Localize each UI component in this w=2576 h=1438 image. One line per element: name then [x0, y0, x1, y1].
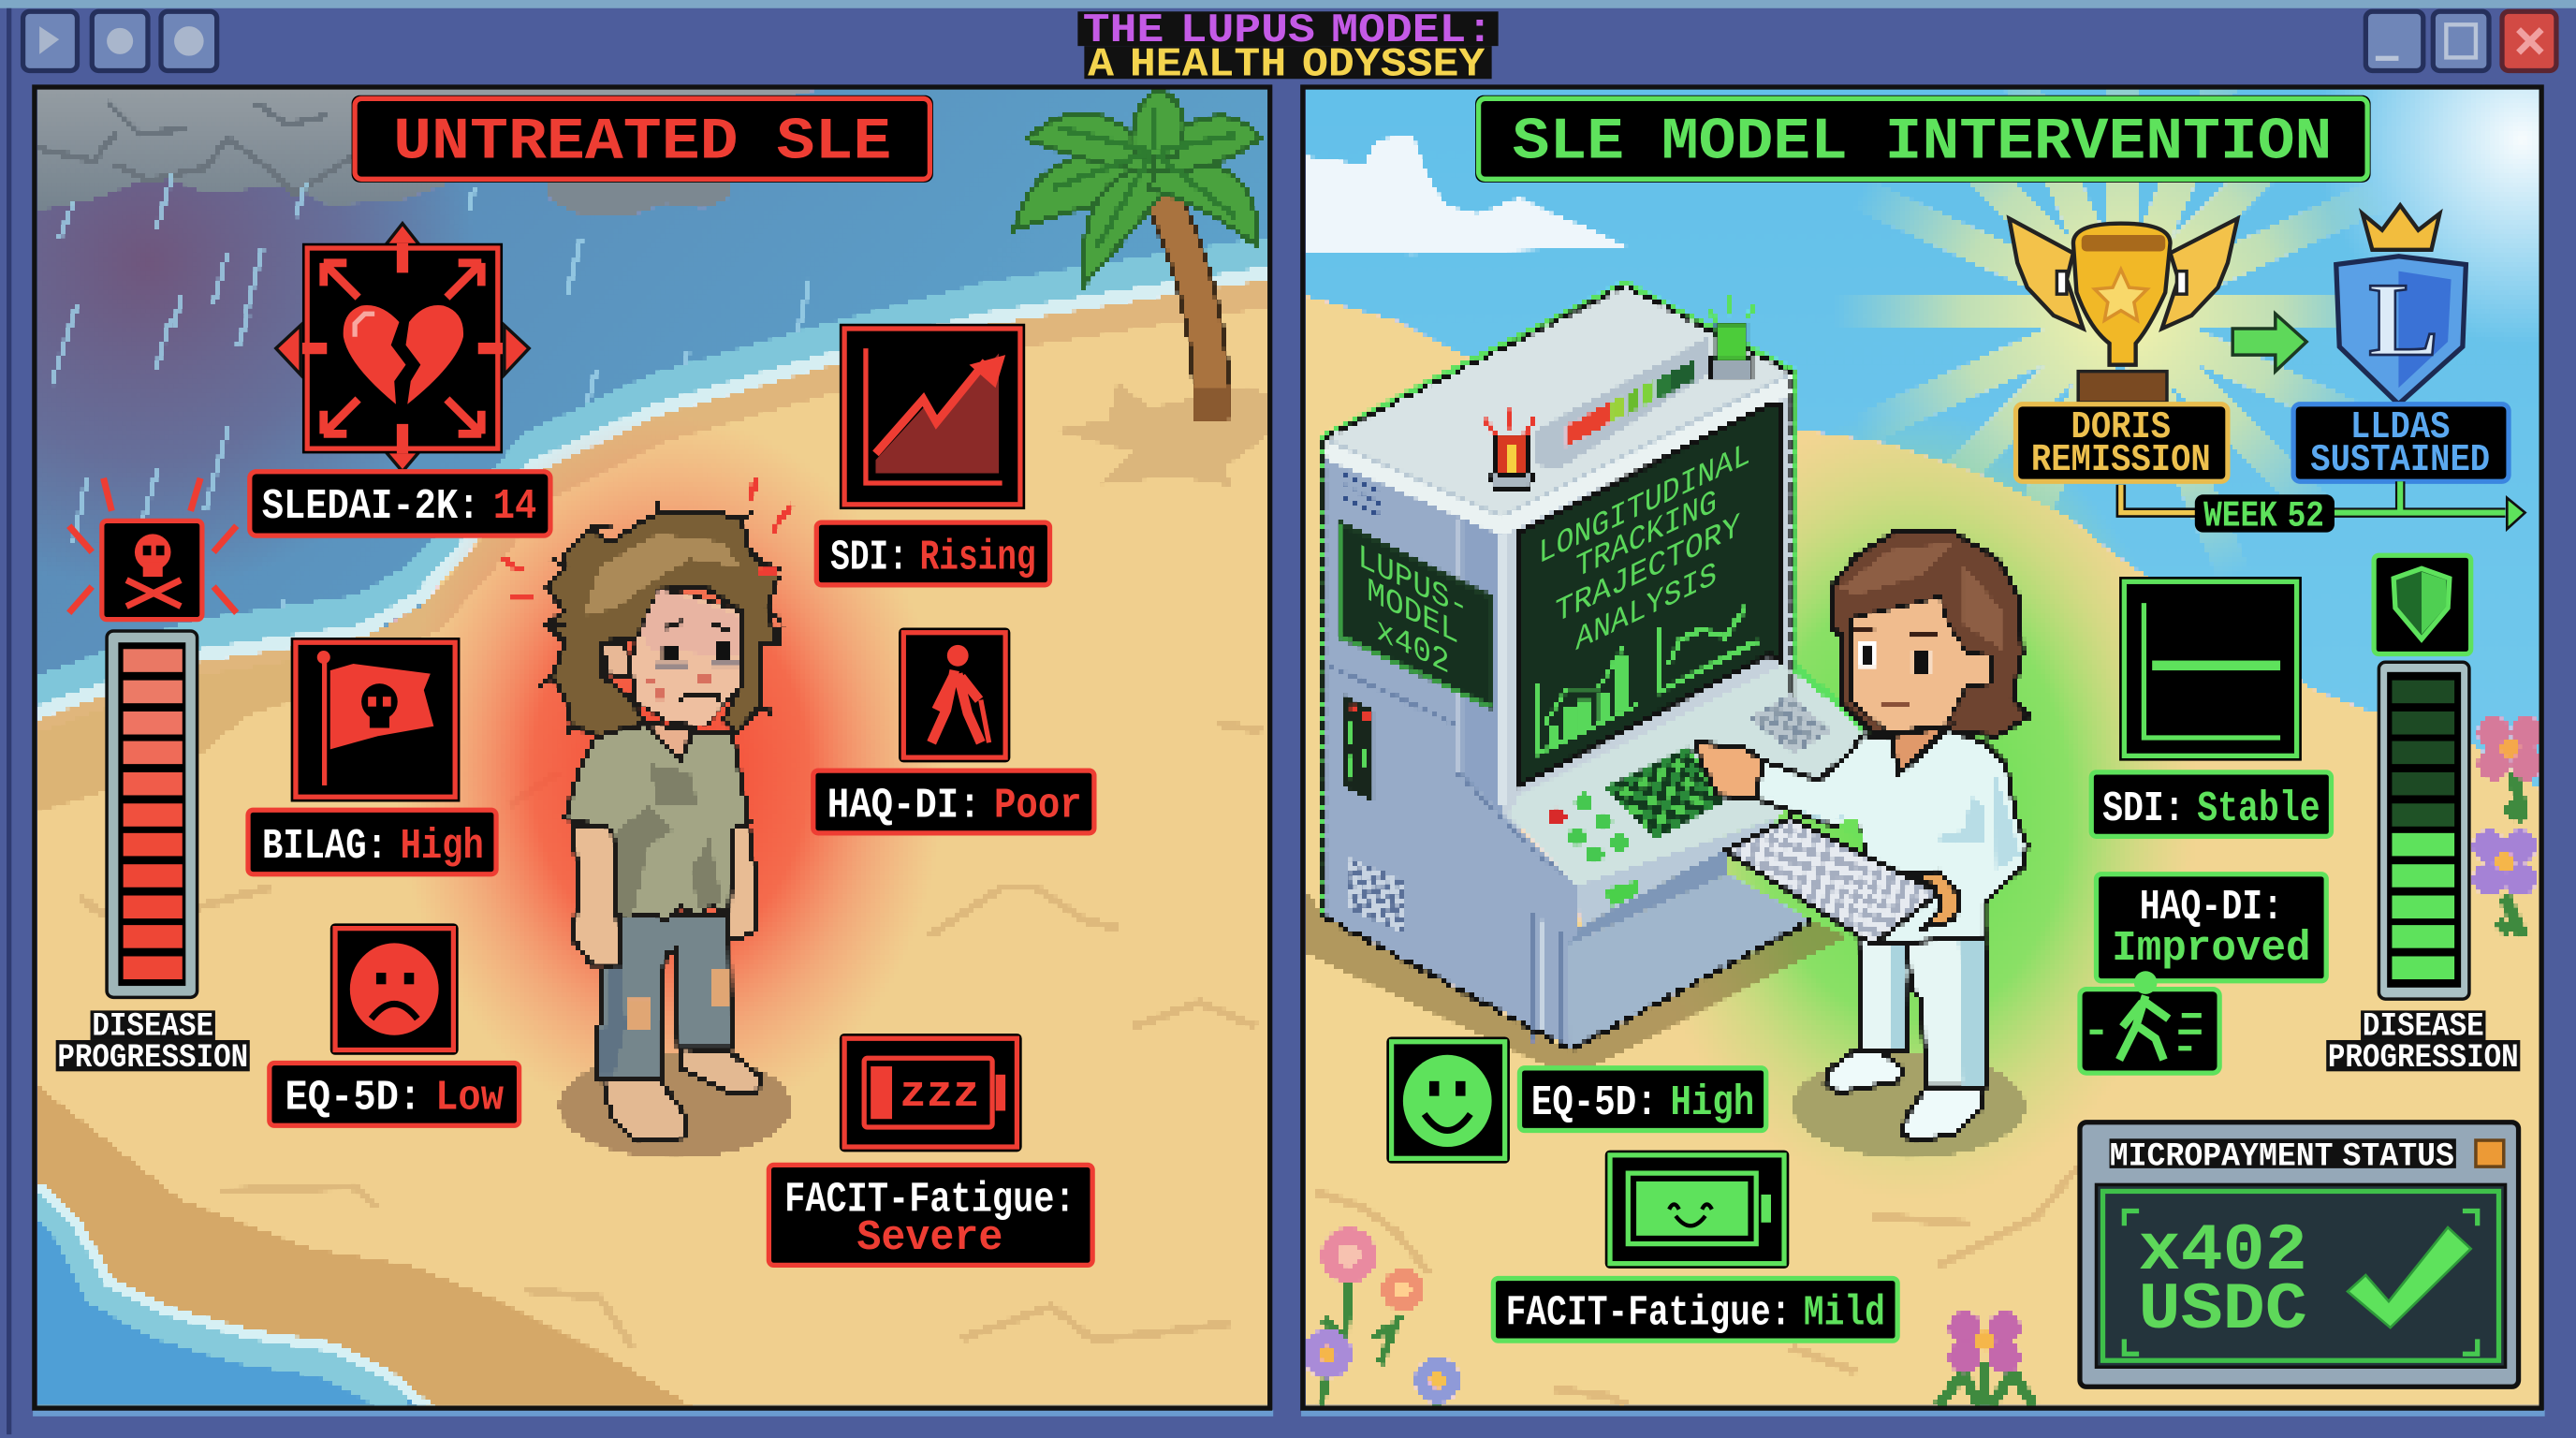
main title: [1077, 7, 1499, 88]
sand marks: [1314, 1167, 2078, 1405]
machine base: [1567, 874, 1812, 1050]
left face: [1325, 459, 1577, 1051]
machine silhouette outline: [1325, 286, 1793, 917]
console surface: [1508, 666, 1873, 886]
label: LLDAS sustained: LLDAS: [2350, 406, 2450, 449]
green glow: [1632, 411, 2197, 1199]
distress sparks: [503, 477, 792, 598]
label: DORIS remission: [2016, 404, 2228, 482]
machine screen text: ANALYSIS: [1575, 555, 1717, 660]
panel: micropayment status: USDC: [2139, 1272, 2307, 1347]
icon: crowned L shield: [2336, 205, 2466, 404]
console lip: [1577, 818, 1776, 927]
icon: empty battery: zzz: [900, 1070, 980, 1120]
palm shadow: [1051, 381, 1268, 487]
side screen: [1339, 522, 1490, 707]
red beacon: [1486, 409, 1534, 490]
label: HAQ-DI improved: Improved: [2112, 925, 2311, 973]
icon: crowned L shield: L: [2368, 262, 2438, 378]
console buttons: [1548, 793, 1636, 907]
title bar buttons right: [2365, 11, 2556, 70]
shoreline sea band: [37, 255, 1268, 695]
label: SDI rising: SDI: Rising: [830, 534, 1036, 582]
timeline: week 52: [2121, 481, 2525, 536]
label: EQ-5D high: EQ-5D: High: [1531, 1078, 1754, 1127]
sand: [37, 283, 1268, 1410]
machine screen text: [1539, 434, 1750, 660]
label: SLEDAI-2K: SLEDAI-2K: 14: [262, 482, 536, 531]
panel: micropayment status: MICROPAYMENT STATUS: [2110, 1139, 2454, 1176]
label: LLDAS sustained: [2293, 404, 2509, 482]
icon: flat chart stable: [2119, 577, 2302, 761]
label: HAQ-DI poor: HAQ-DI: Poor: [827, 782, 1082, 829]
flowers right edge: [2472, 716, 2543, 936]
upper right face: [1501, 394, 1793, 815]
red glow: [412, 435, 927, 1081]
machine screen text: TRACKING: [1575, 483, 1717, 588]
label: BILAG: [248, 810, 496, 874]
main title: A HEALTH ODYSSEY: [1088, 41, 1486, 88]
palm tree: [1014, 89, 1260, 422]
label: disease progression right: [2326, 1007, 2520, 1077]
ocean corner: [37, 1222, 426, 1406]
sun rays: [1834, 24, 2408, 575]
sand dune marks: [79, 723, 1262, 1347]
bar: disease progression left: [107, 631, 198, 997]
icon: happy face: [1386, 1036, 1510, 1164]
label: SDI stable: [2091, 772, 2331, 836]
terminal machine: [1325, 286, 1873, 1051]
rain: [51, 173, 810, 609]
label: EQ-5D low: EQ-5D: Low: [285, 1074, 504, 1122]
label: FACIT-Fatigue severe: FACIT-Fatigue:: [784, 1176, 1076, 1225]
green beacon: [1708, 296, 1754, 379]
label: DORIS remission: DORIS: [2071, 406, 2171, 449]
sand dunes: [1305, 296, 2539, 1406]
wet sand upper: [37, 679, 291, 811]
wet sand along shore: [37, 292, 1268, 733]
panel border: right: [1303, 87, 2541, 1408]
icon: winged trophy: [2009, 218, 2237, 403]
hair spikes: [539, 503, 782, 736]
label: disease progression left: [56, 1007, 250, 1077]
label: FACIT-Fatigue severe: [768, 1165, 1092, 1265]
main screen: [1519, 404, 1779, 785]
label: EQ-5D low: [270, 1064, 520, 1125]
LED strip: [1534, 337, 1708, 468]
icon: happy battery: [1605, 1151, 1789, 1269]
icon: broken heart SLEDAI: [276, 224, 529, 472]
panel: micropayment status: x402: [2139, 1213, 2307, 1288]
keypad: [1605, 746, 1725, 840]
icon: running figure: [2080, 971, 2219, 1073]
bar: disease progression right: [2378, 662, 2469, 999]
label: BILAG: BILAG: High: [262, 823, 484, 871]
label: disease progression left: PROGRESSION: [57, 1038, 248, 1077]
label: LLDAS sustained: SUSTAINED: [2310, 439, 2490, 482]
icon: empty battery: [840, 1034, 1022, 1152]
label: HAQ-DI improved: [2097, 874, 2326, 981]
flowers bottom left: [1303, 1227, 1460, 1406]
machine side screen text: MODEL: [1367, 571, 1458, 653]
panel: stormy beach scene: [37, 89, 1268, 1410]
icon: small shield: [2374, 555, 2471, 654]
storm clouds: [37, 89, 822, 213]
character: untreated patient: [539, 503, 792, 1158]
label: HAQ-DI improved: HAQ-DI:: [2140, 885, 2283, 932]
machine side screen text: LUPUS-: [1358, 537, 1468, 628]
machine side screen text: [1358, 537, 1468, 683]
label: SLEDAI-2K: [250, 472, 550, 536]
cloud: [1305, 135, 1627, 255]
vent: [1347, 858, 1405, 933]
machine side screen text: x402: [1376, 610, 1450, 683]
panel: micropayment status: [2080, 1123, 2519, 1387]
arrow: trophy to shield: [2232, 314, 2306, 372]
label: FACIT-Fatigue severe: Severe: [856, 1214, 1003, 1262]
machine screen text: TRAJECTORY: [1555, 506, 1740, 633]
icon: flag with skull BILAG: [291, 638, 460, 801]
label: disease progression right: DISEASE: [2363, 1007, 2484, 1045]
icon: skull warning: [69, 478, 237, 620]
label: FACIT-Fatigue mild: FACIT-Fatigue: Mild: [1506, 1290, 1885, 1338]
main title: THE LUPUS MODEL:: [1083, 7, 1493, 53]
panel: sunny beach scene: [1303, 24, 2543, 1406]
label: DORIS remission: REMISSION: [2031, 439, 2211, 482]
label: disease progression left: DISEASE: [92, 1007, 213, 1045]
vent text: [1342, 473, 1382, 516]
screen line chart: [1660, 607, 1758, 692]
label: SDI stable: SDI: Stable: [2102, 785, 2320, 833]
timeline: week 52: WEEK 52: [2203, 495, 2324, 536]
wet sand lower: [37, 1084, 698, 1410]
label: SDI rising: [816, 522, 1050, 585]
icon: sad face: [330, 923, 459, 1055]
machine screen text: LONGITUDINAL: [1539, 434, 1750, 574]
grey keypad: [1748, 694, 1832, 755]
machine ground shadow: [1305, 888, 1848, 1078]
label: disease progression right: PROGRESSION: [2328, 1038, 2519, 1077]
flower bottom centre: [1939, 1312, 2034, 1406]
shoreline foam: [37, 272, 1268, 713]
heading: untreated SLE: UNTREATED SLE: [393, 109, 891, 176]
title bar buttons left: [23, 11, 217, 70]
icon: rising chart: [840, 324, 1025, 509]
character: treated patient: [1697, 533, 2029, 1158]
panel border: left: [35, 87, 1270, 1408]
heading: untreated SLE: [352, 95, 933, 183]
icon: walking with cane: [899, 627, 1010, 762]
machine top: [1325, 286, 1793, 516]
status lights panel: [1342, 694, 1373, 801]
screen bar chart: [1536, 644, 1638, 755]
heading: SLE model intervention: SLE MODEL INTERVENTION: [1513, 110, 2332, 176]
